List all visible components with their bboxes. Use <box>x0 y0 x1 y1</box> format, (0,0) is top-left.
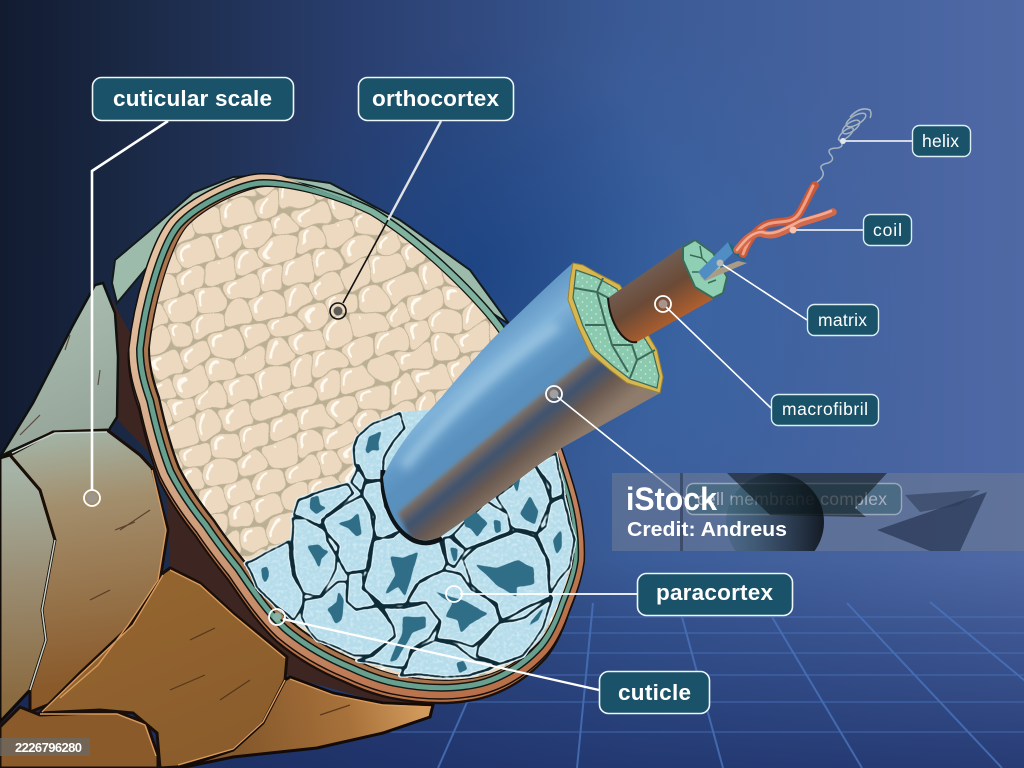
paracortex cell walls <box>247 412 573 677</box>
rim: upper right edge <box>294 181 505 332</box>
label: orthocortex <box>330 78 514 319</box>
matrix block <box>698 242 747 281</box>
label: coil: coil <box>873 220 902 240</box>
watermark text: Credit: Andreus <box>627 519 787 541</box>
paracortex mottled texture <box>240 407 580 683</box>
macrofibril end cap <box>683 240 727 298</box>
scale: far left <box>0 455 55 722</box>
coil strands <box>737 185 833 254</box>
label: cuticle: cuticle <box>618 680 691 705</box>
watermark band <box>612 473 1024 551</box>
rim: copper and tan bands <box>144 189 569 688</box>
tube end cap rim <box>568 263 663 393</box>
orthocortex cells <box>150 187 573 680</box>
label: cell membrane complex: cell membrane complex <box>697 489 887 509</box>
scale: lower left <box>0 707 158 768</box>
floor grid <box>360 602 1024 768</box>
label: cuticular scale: cuticular scale <box>113 86 272 111</box>
cross-section rim layers <box>144 187 573 688</box>
label: cell membrane complex <box>546 386 902 514</box>
cell membrane complex tube <box>380 262 664 546</box>
label: helix <box>840 126 970 156</box>
label: matrix: matrix <box>818 310 867 330</box>
hair shaft with cuticle scales <box>0 175 510 768</box>
image id tag: 2226796280 <box>15 740 82 755</box>
scale: upper pale <box>0 283 118 457</box>
label: paracortex <box>446 574 792 616</box>
label: cuticle <box>269 609 710 714</box>
helix <box>817 109 871 182</box>
scale: lower middle <box>40 568 287 768</box>
label: macrofibril: macrofibril <box>782 399 868 419</box>
tube socket shadow <box>383 470 442 543</box>
label: macrofibril <box>655 296 878 426</box>
watermark text: iStock <box>626 481 717 517</box>
label: helix: helix <box>922 131 959 151</box>
paracortex base <box>247 410 573 678</box>
label: cuticular scale <box>84 78 294 506</box>
tube end cap cells <box>573 270 659 388</box>
label: matrix <box>716 260 878 336</box>
macrofibril islands <box>261 432 562 673</box>
dark flange under the rim <box>112 300 470 704</box>
watermark text <box>628 486 786 536</box>
scale: central cuticular <box>10 430 168 712</box>
scale surface cracks <box>20 335 370 715</box>
image id tag <box>0 738 90 756</box>
tube body <box>383 264 660 540</box>
paracortex cell highlights <box>247 412 573 677</box>
label: coil <box>790 214 912 246</box>
scale: lower right <box>180 677 433 768</box>
pale upper scale rim <box>112 175 510 325</box>
scale edge highlights <box>40 470 431 765</box>
label: orthocortex: orthocortex <box>372 86 499 111</box>
paracortex cells <box>240 407 580 683</box>
label: paracortex: paracortex <box>656 580 773 605</box>
macrofibril tube <box>608 240 727 342</box>
